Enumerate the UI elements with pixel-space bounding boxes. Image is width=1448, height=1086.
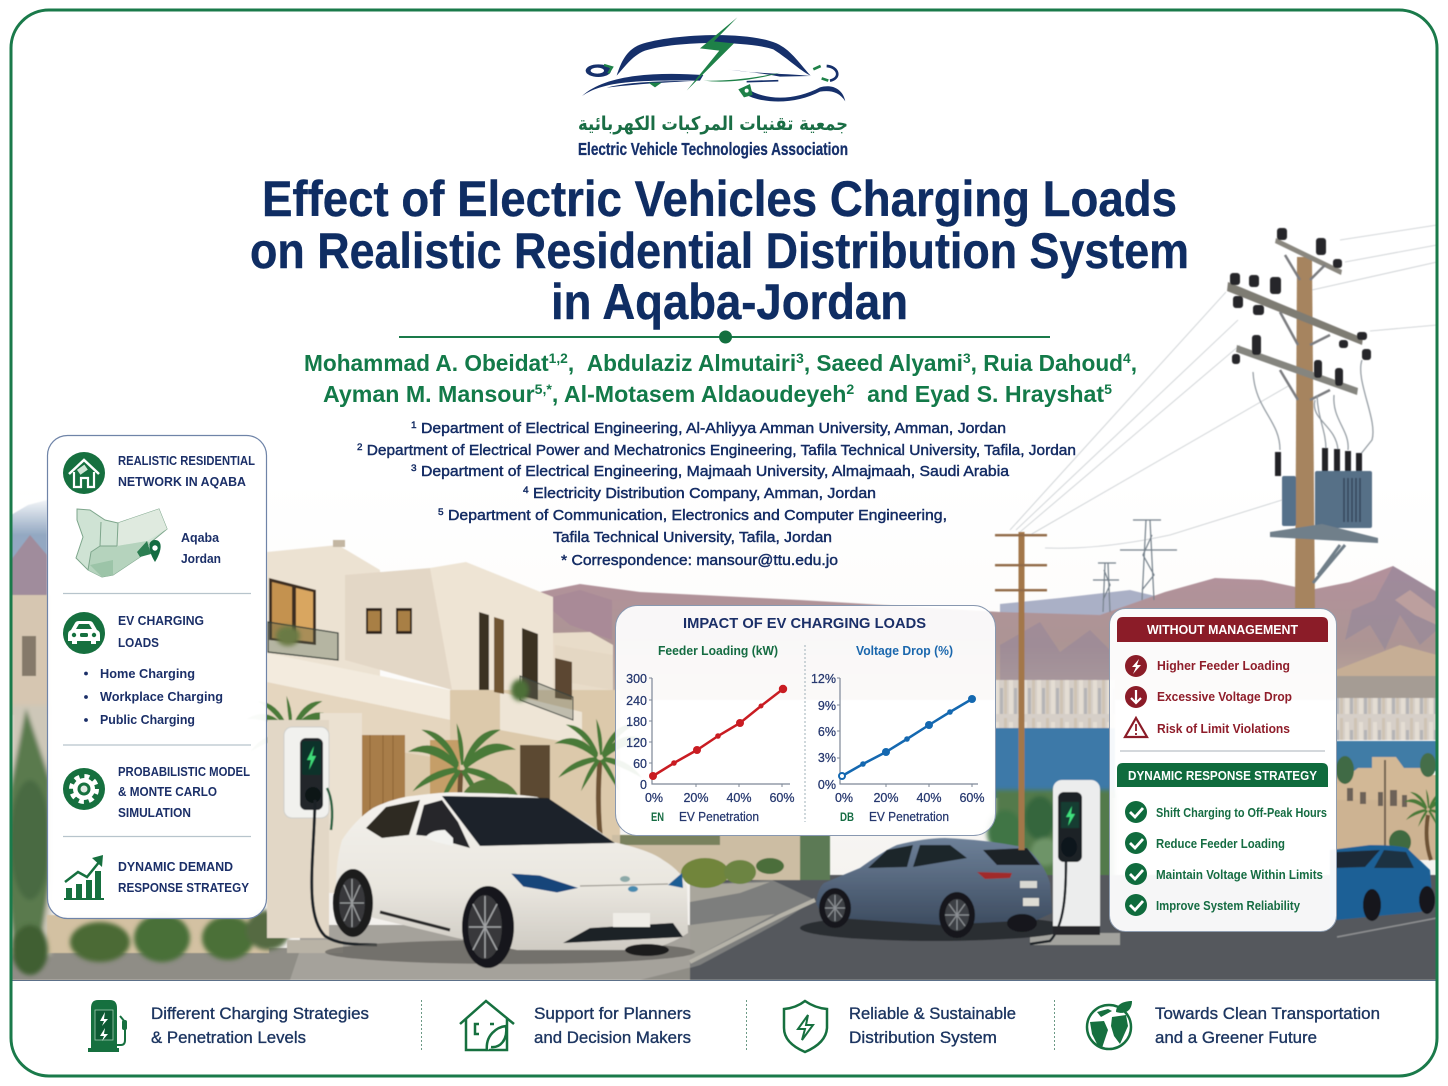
line chart: voltage drop: 12% (811, 672, 836, 686)
line chart: feeder loading: 180 (626, 715, 647, 729)
heading: probabilistic model: & MONTE CARLO (118, 784, 217, 799)
header: dynamic response strategy: DYNAMIC RESPONSE STRATEGY (1128, 768, 1317, 783)
trees behind charger (987, 790, 1115, 885)
charging types list: Public Charging (100, 712, 195, 727)
house facade (267, 540, 620, 842)
heading: EV charging loads: EV CHARGING (118, 613, 204, 628)
line chart: voltage drop: DB (840, 810, 854, 824)
line chart: feeder loading: 240 (626, 694, 647, 708)
map of Jordan (76, 509, 167, 577)
heading: realistic residential network: NETWORK IN AQABA (118, 474, 247, 489)
text: clean transportation: Towards Clean Transportation (1155, 1004, 1380, 1023)
line chart: feeder loading: 300 (626, 672, 647, 686)
authors: Mohammad A. Obeidat (304, 350, 552, 376)
line chart: voltage drop (811, 643, 985, 824)
line chart: feeder loading: 60 (633, 757, 647, 771)
strategy items: Maintain Voltage Within Limits (1156, 868, 1323, 882)
authors: Ayman M. Mansour (323, 381, 533, 407)
main power pole with transformer (1227, 228, 1378, 610)
risk items (1125, 655, 1292, 737)
icon: rising bar chart (64, 855, 104, 900)
authors: and Eyad S. Hrayshat (854, 381, 1104, 407)
title (250, 171, 1189, 330)
line chart: voltage drop: 20% (873, 791, 899, 805)
text: charging strategies (151, 1004, 369, 1047)
line chart: feeder loading: EV Penetration (679, 810, 759, 824)
title: Effect of Electric Vehicles Charging Loads (262, 171, 1177, 227)
ground: pavement and road (11, 875, 1437, 980)
affiliations: Department of Electrical Engineering, Majmaah University, Almajmaah, Saudi Arabia (417, 463, 1010, 480)
strategy items: Reduce Feeder Loading (1156, 837, 1285, 851)
affiliations: Department of Communication, Electronics and Computer Engineering, (444, 507, 947, 524)
garden wall and shrubs (12, 910, 290, 975)
heading: probabilistic model: PROBABILISTIC MODEL (118, 764, 250, 779)
affiliations: Electricity Distribution Company, Amman, Jordan (529, 485, 876, 502)
heading: EV charging loads: LOADS (118, 635, 159, 650)
heading: probabilistic model: SIMULATION (118, 805, 191, 820)
charging types list: Workplace Charging (100, 689, 223, 704)
title: on Realistic Residential Distribution System (250, 223, 1189, 279)
white electric car (325, 792, 695, 968)
trees left edge (6, 705, 51, 955)
authors: 4 (1123, 350, 1131, 366)
chart panel heading: IMPACT OF EV CHARGING LOADS (683, 615, 926, 632)
heading: dynamic demand response: RESPONSE STRATEGY (118, 880, 249, 895)
line chart: voltage drop: 40% (916, 791, 942, 805)
authors: 1,2 (549, 350, 568, 366)
affiliations: Department of Electrical Power and Mechatronics Engineering, Tafila Technical University, Tafila, Jordan (362, 442, 1076, 459)
line chart: feeder loading: Feeder Loading (kW) (658, 643, 778, 658)
mountains: left (11, 495, 51, 600)
strategy items: Shift Charging to Off-Peak Hours (1156, 806, 1327, 820)
risk items: Higher Feeder Loading (1157, 658, 1290, 673)
charging types list (84, 666, 223, 727)
title: in Aqaba-Jordan (551, 274, 908, 330)
charging types list: Home Charging (100, 666, 195, 681)
map labels: Jordan (181, 551, 221, 566)
affiliations: * Correspondence: mansour@ttu.edu.jo (561, 552, 838, 569)
icon: house with leaf (460, 1001, 514, 1051)
affiliations: 2 (357, 442, 362, 453)
title divider (399, 330, 1050, 344)
line chart: voltage drop: 3% (818, 751, 836, 765)
line chart: feeder loading (626, 643, 795, 824)
text: charging strategies: Different Charging Strategies (151, 1004, 369, 1023)
line chart: voltage drop: 6% (818, 725, 836, 739)
blue car at right edge (1330, 845, 1435, 921)
panel: study overview (48, 436, 266, 918)
line chart: voltage drop: 9% (818, 699, 836, 713)
authors: , Al-Motasem Aldaoudeyeh (552, 381, 846, 407)
line chart: feeder loading: 60% (769, 791, 795, 805)
distribution wires (1010, 225, 1437, 548)
strategy items (1125, 801, 1327, 916)
text: planners (534, 1004, 691, 1047)
logo Arabic name: جمعية تقنيات المركبات الكهربائية (578, 113, 848, 135)
authors: , (1131, 350, 1137, 376)
map labels (181, 530, 221, 566)
icon: gear in green circle (63, 768, 105, 810)
icon: globe with leaf (1087, 1001, 1132, 1049)
under-chart street background (612, 835, 830, 888)
authors: 5,* (535, 381, 552, 397)
authors: 3 (796, 350, 804, 366)
text: planners: Support for Planners (534, 1004, 691, 1023)
affiliations: 3 (411, 463, 417, 474)
line chart: feeder loading: 20% (683, 791, 709, 805)
text: reliable system (849, 1004, 1016, 1047)
authors: 2 (846, 381, 854, 397)
free-standing EV charger (1030, 780, 1100, 944)
building block behind left panel (12, 594, 47, 715)
affiliations: 4 (523, 485, 529, 496)
authors: , Saeed Alyami (804, 350, 963, 376)
background scene: Aqaba residential street (6, 225, 1448, 980)
icon: charging pump (88, 1000, 127, 1052)
right seaside buildings (1336, 753, 1437, 860)
logo English name: Electric Vehicle Technologies Association (578, 139, 848, 159)
heading: realistic residential network: REALISTIC RESIDENTIAL (118, 453, 255, 468)
line chart: voltage drop: 60% (959, 791, 985, 805)
affiliations: 5 (438, 507, 444, 518)
charging pillar with wall charger (267, 713, 377, 953)
affiliations (357, 420, 1076, 569)
lattice towers (1093, 520, 1177, 612)
icon: house in green circle (63, 452, 105, 494)
authors (304, 350, 1137, 407)
logo: Electric Vehicle Technologies Association (578, 17, 848, 159)
affiliations: Tafila Technical University, Tafila, Jordan (553, 529, 832, 546)
heading: realistic residential network (118, 453, 255, 489)
text: clean transportation: and a Greener Future (1155, 1028, 1317, 1047)
mountains: background range (540, 566, 1437, 700)
coastal city (995, 676, 1437, 740)
text: clean transportation (1155, 1004, 1380, 1047)
icon: car in green circle (63, 612, 105, 654)
text: planners: and Decision Makers (534, 1028, 691, 1047)
logo mark: car and lightning bolt (582, 17, 845, 102)
map labels: Aqaba (181, 530, 220, 545)
icon: shield with bolt (784, 1001, 827, 1052)
line chart: voltage drop: Voltage Drop (%) (856, 643, 953, 658)
authors: , Abdulaziz Almutairi (568, 350, 796, 376)
bottom strip background (11, 980, 1437, 1076)
affiliations: 1 (411, 420, 417, 431)
header: without management (1117, 617, 1328, 642)
sea (995, 728, 1437, 798)
risk items: Excessive Voltage Drop (1157, 689, 1292, 704)
authors: 5 (1104, 381, 1112, 397)
risk items: Risk of Limit Violations (1157, 721, 1290, 736)
line chart: voltage drop: 0% (835, 791, 853, 805)
header: dynamic response strategy (1117, 763, 1328, 787)
line chart: feeder loading: EN (651, 810, 664, 824)
panel: management comparison (1110, 608, 1336, 932)
text: reliable system: Distribution System (849, 1028, 997, 1047)
strategy items: Improve System Reliability (1156, 899, 1300, 913)
text: charging strategies: & Penetration Levels (151, 1028, 306, 1047)
heading: probabilistic model (118, 764, 250, 820)
heading: dynamic demand response (118, 859, 249, 895)
small power pole (995, 532, 1047, 850)
authors: , Ruia Dahoud (971, 350, 1123, 376)
heading: dynamic demand response: DYNAMIC DEMAND (118, 859, 233, 874)
line chart: feeder loading: 0 (640, 778, 647, 792)
line chart: feeder loading: 0% (645, 791, 663, 805)
line chart: voltage drop: EV Penetration (869, 810, 949, 824)
text: reliable system: Reliable & Sustainable (849, 1004, 1016, 1023)
line chart: voltage drop: 0% (818, 778, 836, 792)
authors: 3 (963, 350, 971, 366)
palm trees (247, 696, 1448, 860)
header: without management: WITHOUT MANAGEMENT (1147, 622, 1298, 637)
heading: EV charging loads (118, 613, 204, 650)
bottom strip: takeaways (88, 1000, 1380, 1052)
line chart: feeder loading: 120 (626, 736, 647, 750)
panel: impact charts (616, 606, 996, 836)
line chart: feeder loading: 40% (726, 791, 752, 805)
grey-blue car (800, 838, 1070, 941)
affiliations: Department of Electrical Engineering, Al-Ahliyya Amman University, Amman, Jordan (417, 420, 1006, 437)
